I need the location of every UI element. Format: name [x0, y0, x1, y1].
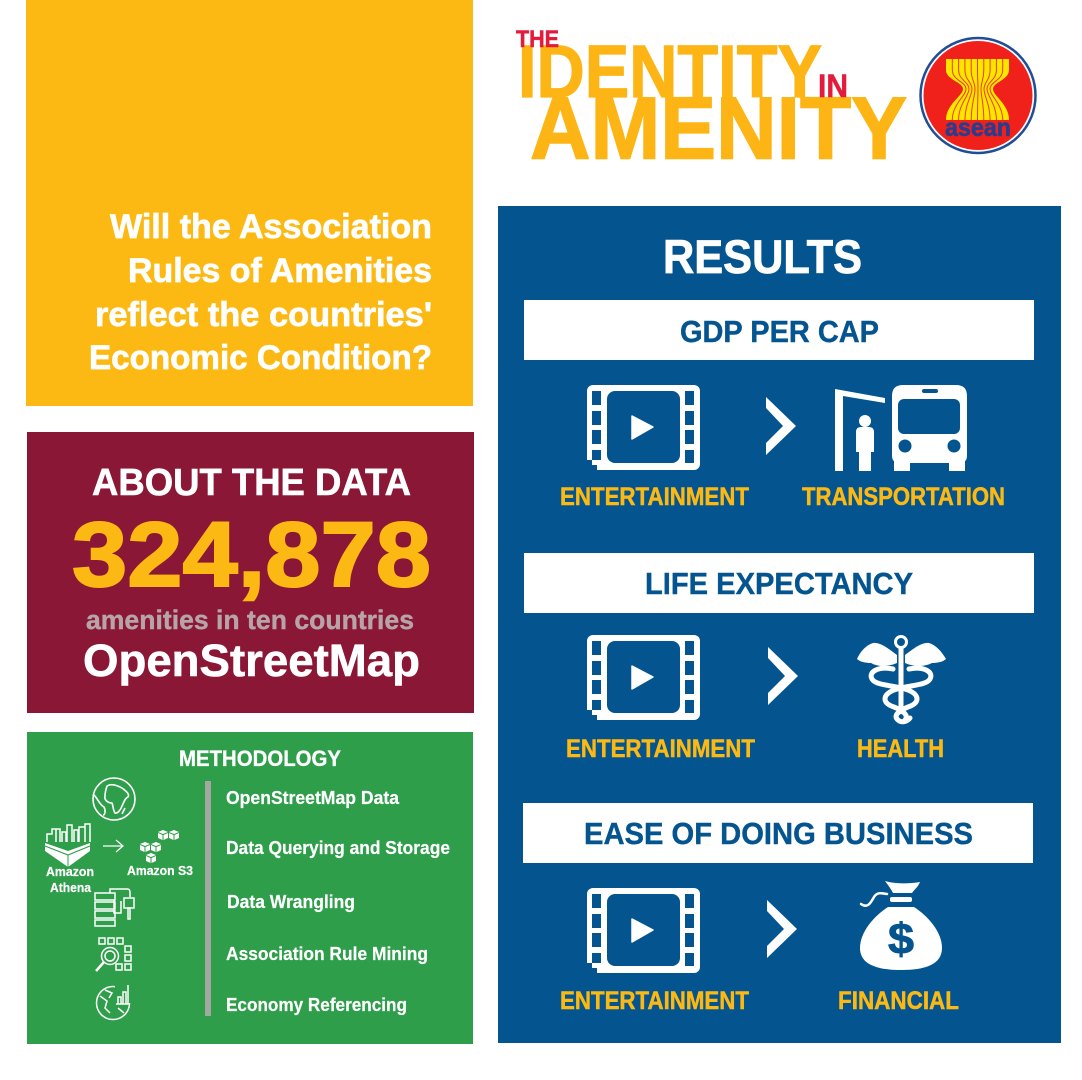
big number: 324,878 — [72, 504, 431, 606]
icon: money bag — [860, 881, 942, 970]
title: THE — [516, 26, 559, 53]
icon: economy globe — [96, 985, 131, 1020]
panel: research question — [26, 0, 473, 406]
icon: Amazon S3 — [127, 830, 193, 878]
steps list: Association Rule Mining — [226, 944, 428, 964]
steps list: Economy Referencing — [226, 995, 407, 1015]
arrow: chevron — [768, 647, 798, 705]
icon: Amazon Athena: Amazon — [46, 865, 94, 879]
panel: methodology — [27, 732, 473, 1044]
caption: amenities in ten countries — [86, 605, 414, 635]
steps list — [226, 788, 450, 1015]
steps list: OpenStreetMap Data — [226, 788, 400, 808]
question text: Will the Association — [110, 208, 432, 246]
icon: entertainment film — [587, 888, 700, 973]
source name: OpenStreetMap — [83, 635, 420, 686]
icon: ASEAN logo: asean — [945, 114, 1011, 142]
question text: Economic Condition? — [89, 339, 432, 377]
icon: globe — [93, 778, 135, 820]
heading: about the data: ABOUT THE DATA — [92, 462, 411, 504]
steps list: Data Querying and Storage — [226, 838, 450, 858]
heading: methodology: METHODOLOGY — [179, 746, 341, 771]
icon: Amazon Athena: Athena — [50, 881, 92, 895]
timeline bar — [205, 781, 211, 1016]
icon: data wrangling server — [95, 889, 134, 926]
steps list: Data Wrangling — [227, 892, 355, 912]
icon: association rule search — [96, 938, 131, 971]
icon: entertainment film — [587, 385, 700, 470]
title — [516, 26, 907, 178]
label: entertainment: ENTERTAINMENT — [560, 483, 749, 511]
icon: Amazon Athena — [45, 824, 94, 895]
icon: bus stop — [835, 385, 967, 471]
title: AMENITY — [530, 78, 907, 178]
icon: caduceus — [857, 636, 946, 722]
title: IDENTITY — [518, 30, 822, 113]
label: transportation: TRANSPORTATION — [802, 483, 1005, 511]
result bar: GDP per cap — [524, 300, 1034, 360]
heading: results: RESULTS — [663, 230, 862, 283]
icon: entertainment film — [587, 635, 700, 720]
result bar: ease of doing business: EASE OF DOING BUSINESS — [584, 816, 973, 851]
panel: about the data — [27, 432, 474, 713]
icon: money bag: $ — [888, 915, 914, 964]
arrow: Athena to S3 — [103, 840, 123, 852]
panel: results — [498, 206, 1061, 1043]
result bar: ease of doing business — [523, 803, 1033, 863]
result bar: life expectancy — [524, 553, 1034, 613]
label: entertainment: ENTERTAINMENT — [566, 735, 755, 763]
arrow: chevron — [767, 900, 797, 958]
icon: Amazon S3: Amazon S3 — [127, 864, 193, 878]
question text: reflect the countries' — [95, 296, 432, 334]
question text: Rules of Amenities — [128, 252, 432, 290]
label: health: HEALTH — [857, 735, 944, 763]
question text — [89, 208, 432, 377]
result bar: life expectancy: LIFE EXPECTANCY — [645, 566, 913, 601]
label: entertainment: ENTERTAINMENT — [560, 987, 749, 1015]
icon: ASEAN logo — [920, 38, 1036, 153]
arrow: chevron — [766, 397, 796, 455]
result bar: GDP per cap: GDP PER CAP — [680, 314, 879, 349]
title: IN — [818, 68, 848, 104]
label: financial: FINANCIAL — [838, 987, 959, 1015]
